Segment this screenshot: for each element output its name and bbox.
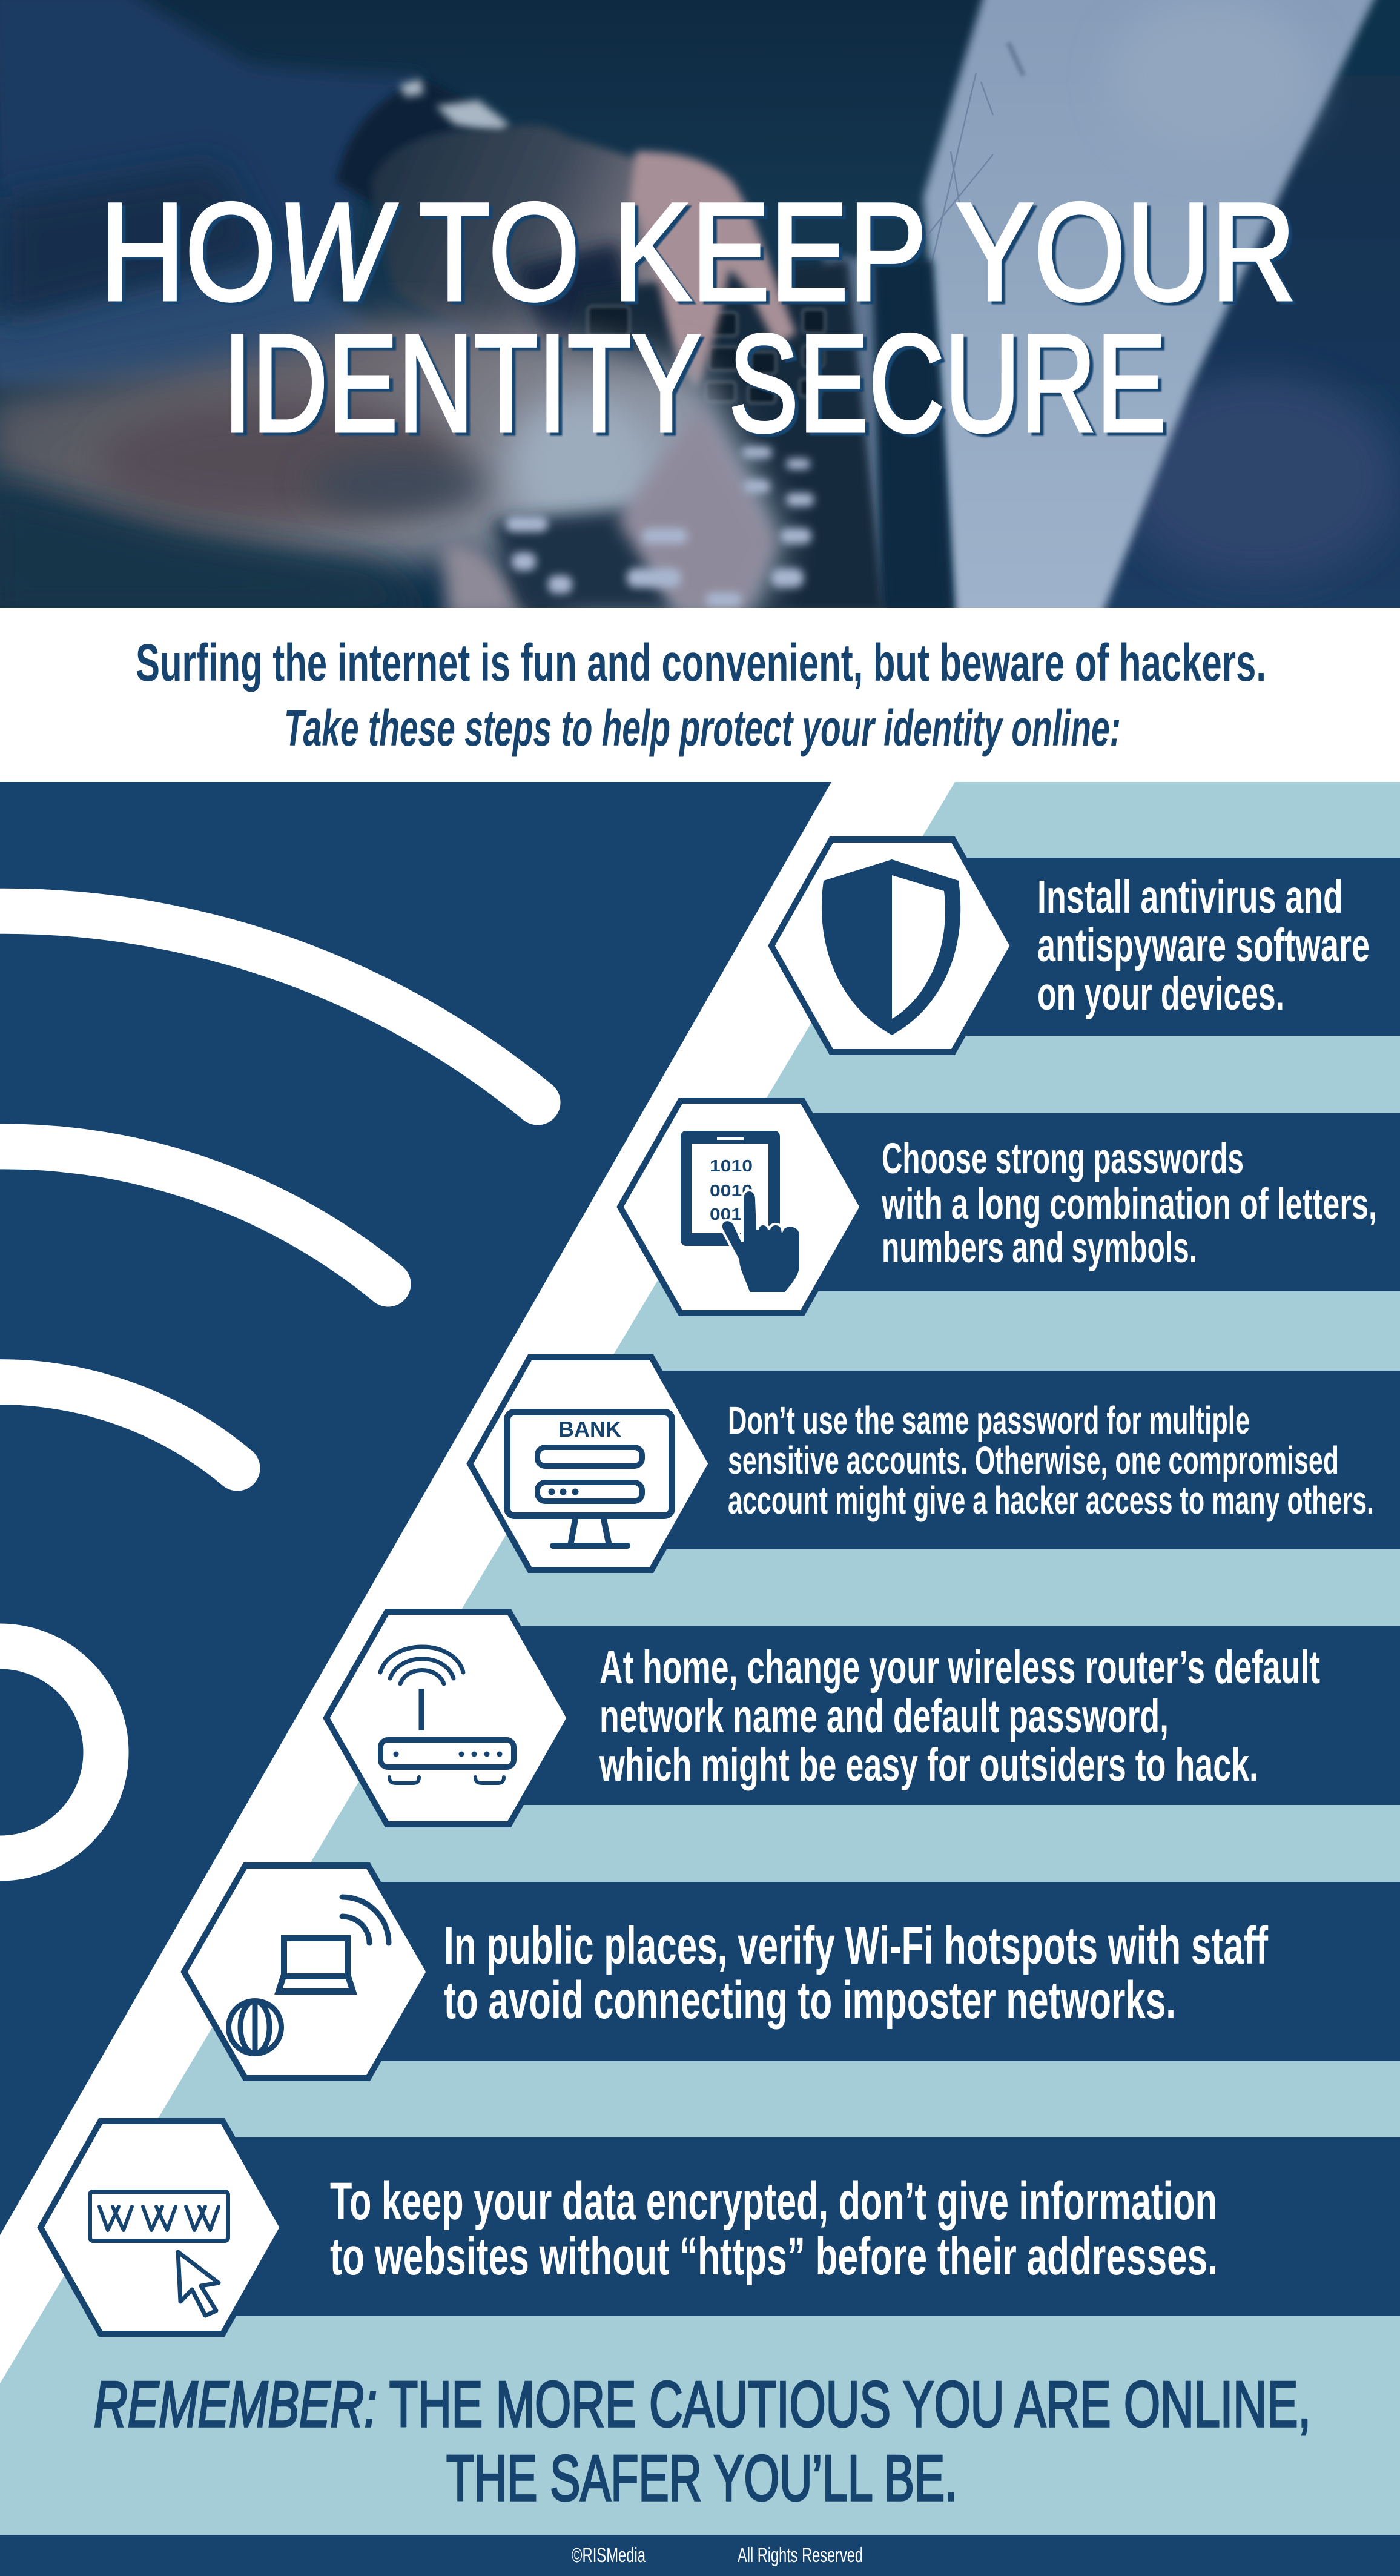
step 5: public wi-fi <box>184 1866 1400 2078</box>
step 4 text: network name and default password, <box>599 1690 1169 1743</box>
hexagon 2 <box>620 1101 863 1313</box>
step 4 text <box>599 1641 1320 1791</box>
hexagon 5 <box>184 1866 429 2078</box>
step 6: https websites <box>41 2121 1400 2334</box>
step 3: unique passwords <box>470 1357 1400 1570</box>
hexagon 6 <box>41 2121 283 2334</box>
step 3 text <box>728 1399 1374 1522</box>
panel: steps background <box>0 782 1400 2535</box>
icon: tablet and pointing hand <box>681 1131 801 1293</box>
step 2: strong passwords <box>620 1101 1400 1313</box>
footer <box>0 2535 1400 2576</box>
hexagon 3 <box>470 1357 712 1570</box>
step 6 text <box>330 2172 1218 2286</box>
intro band <box>0 608 1400 782</box>
title <box>100 174 1296 461</box>
step 4: home router <box>326 1612 1400 1824</box>
icon: wireless router <box>380 1647 513 1783</box>
step 1: antivirus <box>771 839 1400 1052</box>
step 2 text: numbers and symbols. <box>882 1224 1197 1272</box>
icon: large wifi symbol <box>0 911 538 1858</box>
footer rights: All Rights Reserved <box>738 2544 863 2567</box>
icon: tablet and pointing hand: 001 <box>710 1205 742 1223</box>
icon: laptop, wifi and globe <box>229 1897 389 2053</box>
closing message <box>94 2368 1311 2514</box>
step 1 text: on your devices. <box>1037 968 1284 1020</box>
hexagon 1 <box>771 839 1013 1052</box>
icon: bank login monitor: BANK <box>558 1417 621 1442</box>
step 1 text <box>1037 871 1370 1020</box>
icon: shield <box>822 859 960 1035</box>
icon: www bar and cursor <box>90 2191 228 2316</box>
footer copyright: ©RISMedia <box>572 2544 646 2567</box>
icon: tablet and pointing hand: 0010 <box>710 1181 753 1200</box>
step 2 text <box>881 1135 1377 1272</box>
step 5 text <box>444 1916 1269 2030</box>
closing line 2: THE SAFER YOU’LL BE. <box>446 2442 957 2514</box>
hexagon 4 <box>326 1612 570 1824</box>
header photo: hands typing on a laptop <box>0 0 1400 642</box>
icon: bank login monitor <box>507 1412 672 1546</box>
icon: tablet and pointing hand: 1010 <box>710 1156 753 1175</box>
